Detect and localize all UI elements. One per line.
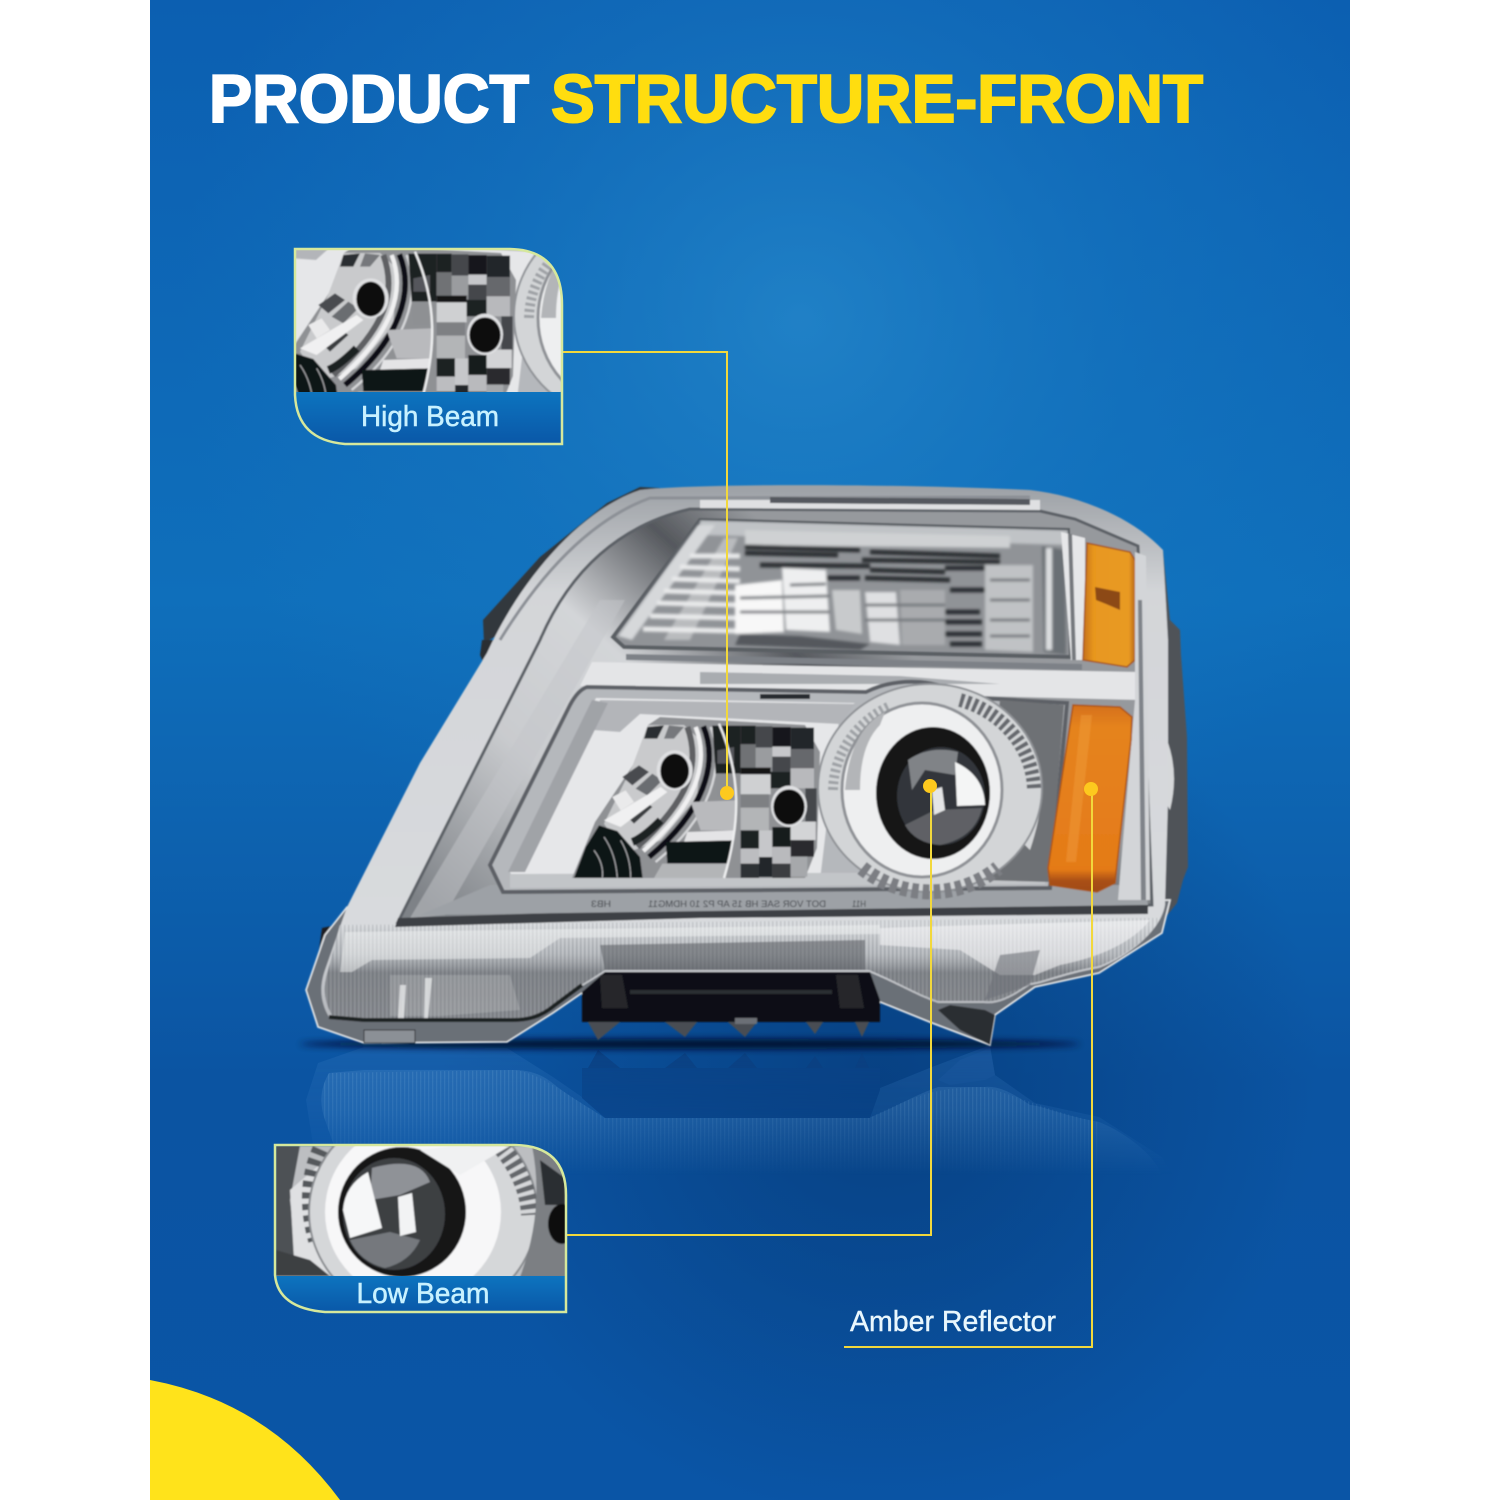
callout: Low Beam inset xyxy=(274,1144,568,1314)
inset photo: high beam reflector xyxy=(296,250,561,392)
lamp reflection on floor xyxy=(306,1048,1140,1158)
title: PRODUCT xyxy=(209,61,529,137)
caption: Low Beam: Low Beam xyxy=(356,1278,490,1310)
inset border: high beam xyxy=(295,249,562,444)
title highlight: STRUCTURE-FRONT xyxy=(551,61,1203,137)
floor shadow xyxy=(300,1039,1080,1049)
decorative yellow corner xyxy=(150,1380,340,1500)
callout label: Amber Reflector: Amber Reflector xyxy=(850,1306,1056,1338)
callout: High Beam inset xyxy=(294,248,564,446)
callout line: high beam xyxy=(563,352,734,800)
caption band: low beam xyxy=(276,1276,566,1312)
callout line: amber reflector xyxy=(844,782,1098,1347)
panel: blue background xyxy=(150,0,1350,1500)
caption: High Beam: High Beam xyxy=(361,401,499,433)
inset border: low beam xyxy=(275,1145,566,1312)
headlight product illustration xyxy=(306,485,1188,1045)
inset photo: low beam projector xyxy=(276,1146,565,1276)
callout line: low beam xyxy=(567,779,937,1235)
caption band: high beam xyxy=(296,392,561,443)
